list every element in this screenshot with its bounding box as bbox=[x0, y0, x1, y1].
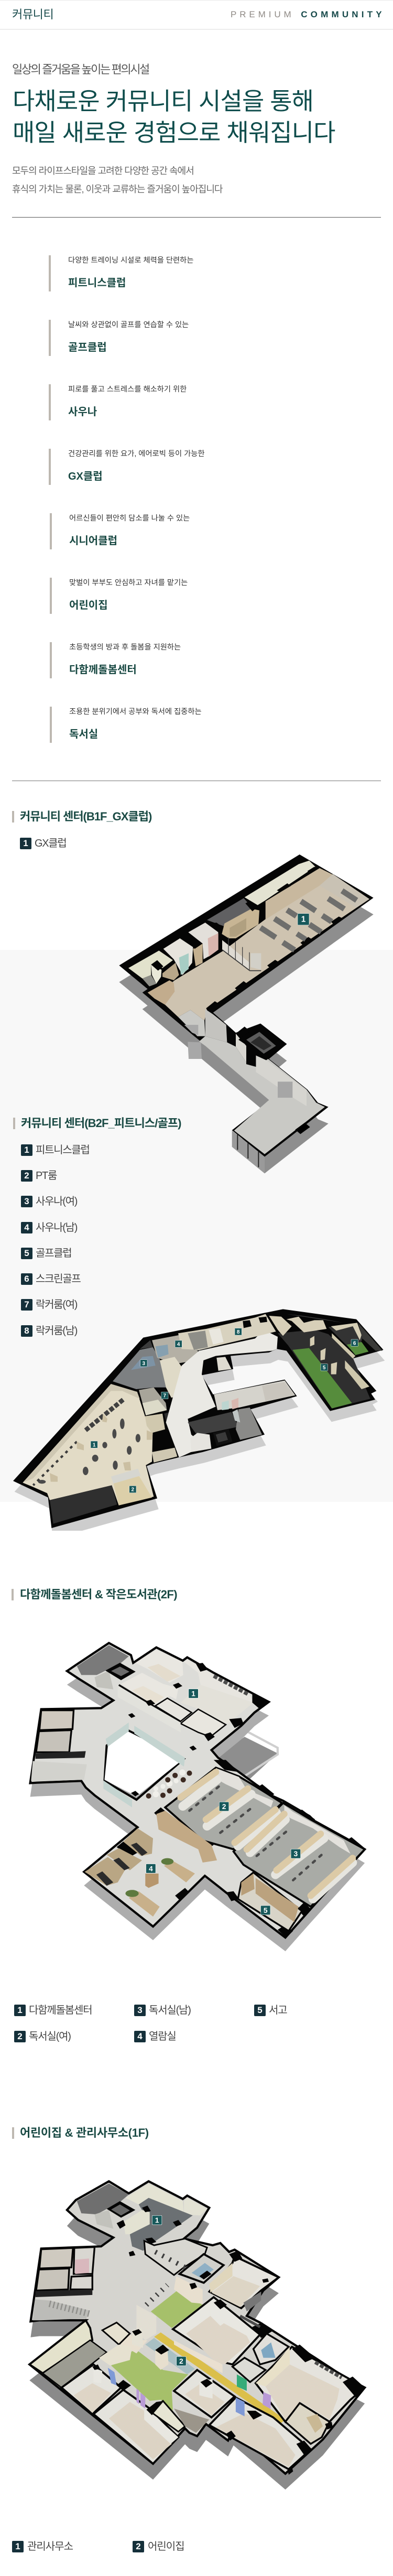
legend row 5: 서고 bbox=[269, 2005, 287, 2016]
floor plan: 1F daycare and management office bbox=[28, 2180, 367, 2490]
section background band bbox=[0, 950, 393, 1502]
legend row 1: 피트니스클럽 bbox=[36, 1144, 90, 1156]
legend row 2: 독서실(여) bbox=[29, 2031, 71, 2042]
legend row 2: 2 bbox=[17, 2031, 23, 2041]
legend row 3: 사우나(여) bbox=[36, 1196, 77, 1207]
floor plan: 2F care center and library bbox=[29, 1642, 367, 1951]
facility: daycare: 맞벌이 부부도 안심하고 자녀를 맡기는 bbox=[69, 579, 188, 587]
facility: senior club: 어르신들이 편안히 담소를 나눌 수 있는 bbox=[69, 514, 190, 523]
main heading bbox=[13, 88, 335, 146]
map markers bbox=[146, 1689, 301, 1915]
heading: B2F: 커뮤니티 센터(B2F_피트니스/골프) bbox=[21, 1117, 181, 1130]
heading: 2F: 다함께돌봄센터 & 작은도서관(2F) bbox=[20, 1588, 177, 1601]
map markers: 7 bbox=[163, 1393, 167, 1399]
legend row 2: 어린이집 bbox=[148, 2541, 184, 2552]
map markers bbox=[152, 2215, 186, 2366]
facility: reading room bbox=[50, 707, 202, 743]
map markers: 2 bbox=[179, 2357, 183, 2365]
facility list bbox=[49, 255, 205, 743]
facility: sauna bbox=[49, 384, 187, 420]
legend row 1: 1 bbox=[24, 1145, 29, 1155]
facility: senior club: 시니어클럽 bbox=[69, 535, 117, 547]
legend row 5 bbox=[254, 2005, 287, 2016]
legend row 8: 락커룸(남) bbox=[36, 1325, 77, 1337]
legend: B2F bbox=[21, 1144, 90, 1337]
facility: after-school care center bbox=[50, 642, 181, 678]
map markers: 6 bbox=[353, 1340, 356, 1346]
legend: B1F bbox=[20, 838, 66, 849]
heading: B1F: 커뮤니티 센터(B1F_GX클럽) bbox=[20, 810, 151, 823]
facility: daycare: 어린이집 bbox=[69, 600, 108, 611]
floor plan: B1F GX club bbox=[119, 854, 374, 1173]
intro subtitle: 일상의 즐거움을 높이는 편의시설 bbox=[12, 63, 149, 76]
legend row 3: 독서실(남) bbox=[149, 2005, 191, 2016]
map markers: 3 bbox=[143, 1361, 146, 1367]
map markers: 1 bbox=[191, 1690, 195, 1698]
legend row 2: 2 bbox=[24, 1171, 29, 1181]
facility: golf club: 골프클럽 bbox=[68, 342, 107, 353]
legend row 4: 4 bbox=[137, 2031, 143, 2041]
map markers: 5 bbox=[264, 1906, 268, 1914]
facility: after-school care center: 초등학생의 방과 후 돌봄을 지원하는 bbox=[69, 643, 181, 652]
legend row 7: 7 bbox=[24, 1300, 29, 1309]
legend row 4 bbox=[134, 2031, 176, 2042]
map markers: 4 bbox=[149, 1864, 153, 1873]
legend row 8: 8 bbox=[24, 1326, 29, 1336]
legend row 5: 5 bbox=[257, 2005, 263, 2015]
header bar bbox=[0, 0, 393, 30]
heading: 1F: 어린이집 & 관리사무소(1F) bbox=[20, 2126, 149, 2139]
legend row 5: 골프클럽 bbox=[36, 1248, 71, 1259]
facility: sauna: 피로를 풀고 스트레스를 해소하기 위한 bbox=[68, 385, 187, 394]
map markers: 8 bbox=[237, 1329, 240, 1335]
facility: golf club: 날씨와 상관없이 골프를 연습할 수 있는 bbox=[68, 321, 189, 329]
facility: after-school care center: 다함께돌봄센터 bbox=[69, 664, 137, 676]
facility: senior club bbox=[50, 513, 190, 549]
facility: golf club bbox=[49, 320, 189, 356]
facility: GX club bbox=[49, 449, 205, 485]
legend: 2F bbox=[14, 2005, 287, 2042]
facility: reading room: 독서실 bbox=[69, 729, 98, 740]
legend row 2 bbox=[21, 1170, 57, 1182]
map markers: 3 bbox=[294, 1849, 298, 1858]
map markers: 1 bbox=[155, 2216, 159, 2224]
legend row 7: 락커룸(여) bbox=[36, 1299, 77, 1311]
map markers: 5 bbox=[323, 1365, 326, 1371]
header brand label: PREMIUM COMMUNITY bbox=[231, 9, 385, 19]
map markers bbox=[91, 1328, 358, 1493]
legend row 1: 다함께돌봄센터 bbox=[29, 2005, 92, 2016]
facility: sauna: 사우나 bbox=[68, 406, 97, 418]
main heading: 매일 새로운 경험으로 채워집니다 bbox=[13, 119, 335, 146]
legend: 1F bbox=[12, 2541, 184, 2552]
map markers: 1 bbox=[93, 1442, 96, 1448]
facility: reading room: 조용한 분위기에서 공부와 독서에 집중하는 bbox=[69, 708, 202, 716]
legend row 1: 1 bbox=[17, 2005, 23, 2015]
facility: daycare bbox=[50, 578, 188, 614]
legend: B1F: GX클럽 bbox=[35, 838, 66, 849]
legend row 5: 5 bbox=[24, 1248, 29, 1258]
intro paragraph: 모두의 라이프스타일을 고려한 다양한 공간 속에서 bbox=[12, 166, 194, 176]
facility: GX club: GX클럽 bbox=[68, 471, 103, 482]
intro paragraph: 휴식의 가치는 물론, 이웃과 교류하는 즐거움이 높아집니다 bbox=[12, 184, 222, 194]
intro paragraph bbox=[12, 166, 223, 194]
legend row 6: 스크린골프 bbox=[36, 1273, 81, 1285]
legend row 3: 3 bbox=[137, 2005, 143, 2015]
facility: fitness club: 다양한 트레이닝 시설로 체력을 단련하는 bbox=[68, 256, 194, 265]
legend row 2: 2 bbox=[136, 2541, 141, 2551]
map markers: 4 bbox=[177, 1341, 180, 1347]
legend row 2: PT룸 bbox=[36, 1170, 57, 1182]
facility: fitness club bbox=[49, 255, 194, 291]
legend row 4: 사우나(남) bbox=[36, 1222, 77, 1233]
legend row 6: 6 bbox=[24, 1274, 29, 1284]
map markers: 2 bbox=[222, 1802, 226, 1811]
legend row 3: 3 bbox=[24, 1196, 29, 1206]
legend row 4: 열람실 bbox=[149, 2031, 176, 2042]
floor plan: B2F fitness and golf bbox=[13, 1309, 385, 1531]
legend: B1F: 1 bbox=[23, 838, 28, 848]
legend row 4: 4 bbox=[24, 1222, 29, 1232]
legend row 1: 관리사무소 bbox=[27, 2541, 73, 2552]
main heading: 다채로운 커뮤니티 시설을 통해 bbox=[13, 88, 313, 115]
map marker 1 bbox=[298, 914, 309, 925]
header title: 커뮤니티 bbox=[12, 8, 53, 21]
facility: GX club: 건강관리를 위한 요가, 에어로빅 등이 가능한 bbox=[68, 450, 205, 458]
map markers: 2 bbox=[132, 1487, 135, 1493]
facility: fitness club: 피트니스클럽 bbox=[68, 277, 126, 289]
map marker 1: 1 bbox=[301, 915, 306, 924]
legend row 1: 1 bbox=[15, 2541, 20, 2551]
